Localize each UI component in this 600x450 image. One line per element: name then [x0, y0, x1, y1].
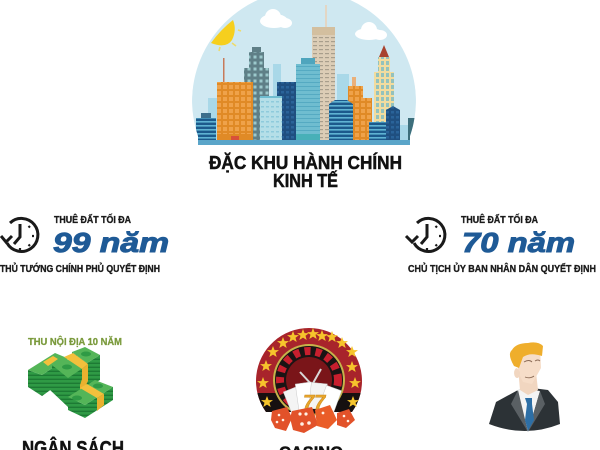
- lease label: THUÊ ĐẤT TỐI ĐA: [461, 212, 538, 226]
- budget column: [22, 335, 124, 450]
- casino column: [256, 328, 362, 450]
- right block: 70 years lease: [406, 212, 596, 275]
- jacket: [489, 388, 560, 431]
- ground strip: [198, 140, 410, 145]
- icon: businessman: [489, 342, 560, 432]
- lapels: [511, 390, 545, 432]
- playing cards: [283, 382, 342, 414]
- icon: roulette, cards and dice: 77: [303, 392, 326, 414]
- left block: 99 years lease: [0, 212, 169, 275]
- front stack: [68, 397, 85, 418]
- hair: [510, 342, 543, 368]
- sky dome: [192, 0, 416, 136]
- yellow band over middle stacks: [64, 353, 88, 369]
- title: ĐẶC KHU HÀNH CHÍNH: [209, 152, 402, 173]
- sun: [211, 20, 241, 51]
- icon: money stacks: [28, 347, 113, 418]
- closed eyes and mouth: [524, 360, 540, 378]
- back left stack: [28, 370, 42, 396]
- dice: [271, 405, 355, 433]
- illustration: city skyline in a sky dome: [192, 0, 416, 145]
- icon: clock left: [1, 218, 38, 251]
- clouds: [260, 9, 387, 40]
- icon: clock right: [406, 218, 445, 251]
- tie: [525, 398, 534, 431]
- yellow band on front stack: [80, 384, 104, 398]
- title: [209, 152, 402, 191]
- skyline buildings: [196, 5, 416, 142]
- wheel housing: [256, 328, 362, 412]
- lease label: THUÊ ĐẤT TỐI ĐA: [54, 212, 131, 226]
- title: KINH TẾ: [273, 170, 338, 191]
- base between stacks: [42, 372, 90, 407]
- shirt: [517, 389, 540, 432]
- lease duration: 99 năm: [53, 227, 169, 258]
- roulette wheel: [273, 344, 345, 416]
- budget caption: THU NỘI ĐỊA 10 NĂM: [28, 335, 122, 348]
- stars: [267, 346, 279, 357]
- middle stack: [52, 365, 68, 400]
- back right stack: [72, 352, 87, 388]
- neck and face: [518, 368, 538, 395]
- decision maker: THỦ TƯỚNG CHÍNH PHỦ QUYẾT ĐỊNH: [0, 262, 160, 275]
- lease duration: 70 năm: [462, 227, 575, 258]
